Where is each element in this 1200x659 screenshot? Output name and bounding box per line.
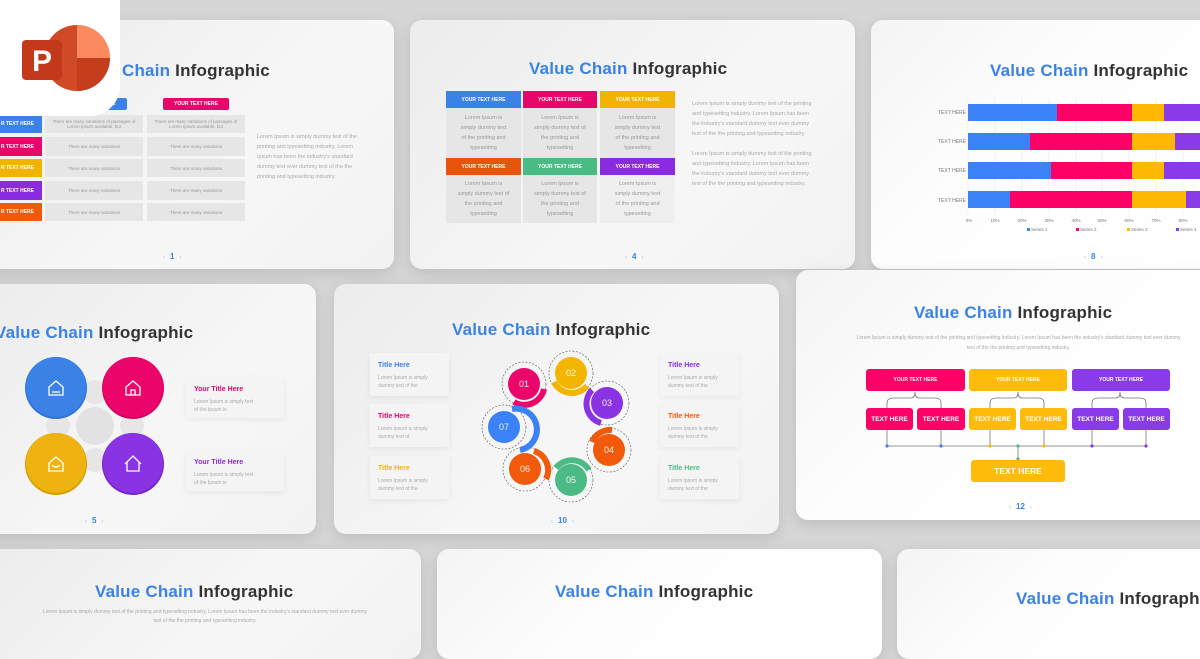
right cards <box>663 362 736 500</box>
grid slide 4: of the printing and <box>615 135 660 141</box>
grid slide 4: typesetting <box>547 145 573 151</box>
grid slide 4: YOUR TEXT HERE <box>616 164 659 170</box>
grid slide 4: Lorem Ipsum is <box>465 181 502 187</box>
left cards: dummy text of <box>378 434 409 440</box>
title slide 8: Value Chain Infographic <box>990 61 1188 80</box>
stacked bar chart: 0% <box>966 218 972 223</box>
hierarchy diagram: TEXT HERE <box>974 416 1011 422</box>
left cards: dummy text of the <box>378 486 418 492</box>
grid slide 4: typesetting <box>547 211 573 217</box>
page number 12: ‹ 12 › <box>1009 502 1032 511</box>
right cards: dummy text of the <box>668 486 708 492</box>
stacked bar chart <box>938 98 1200 232</box>
cycle diagram: 05 <box>566 475 576 485</box>
hierarchy diagram: TEXT HERE <box>871 416 908 422</box>
stacked bar chart: 40% <box>1071 218 1081 223</box>
right cards: Lorem Ipsum is simply <box>668 478 718 484</box>
left cards: Lorem Ipsum is simply <box>378 426 428 432</box>
grid slide 4: Lorem Ipsum is <box>619 115 656 121</box>
stacked bar chart: Series 3 <box>1131 227 1148 232</box>
title slide 5: Value Chain Infographic <box>0 323 193 342</box>
table slide 1: HERE <box>102 101 115 107</box>
hierarchy diagram: TEXT HERE <box>923 416 959 422</box>
left cards <box>373 362 446 500</box>
hierarchy diagram <box>866 369 1170 482</box>
page number 1: ‹ 1 › <box>163 252 181 261</box>
stacked bar chart: 20% <box>1017 218 1027 223</box>
table slide 1: There are many variations <box>170 166 222 170</box>
card: your title pink: of the Ipsum is <box>194 407 227 413</box>
grid slide 4: Lorem Ipsum is <box>541 181 579 187</box>
grid slide 4: typesetting <box>470 211 497 217</box>
cycle diagram: 03 <box>602 398 612 408</box>
table slide 1: There are many variations <box>68 144 120 149</box>
grid slide 4: YOUR TEXT HERE <box>462 96 505 102</box>
grid slide 4: YOUR TEXT HERE <box>616 96 659 102</box>
page number 5: ‹ 5 › <box>85 516 103 525</box>
slide 10: cycle <box>334 284 779 534</box>
grid slide 4: simply dummy text of <box>458 191 509 197</box>
cycle diagram: 07 <box>499 422 509 432</box>
slide 8: bar chart <box>871 20 1200 269</box>
card: your title purple: Lorem Ipsum is simply text <box>194 472 253 478</box>
slide 12: hierarchy <box>796 270 1200 520</box>
right cards: Title Here <box>668 465 700 472</box>
table slide 1: There are many variations <box>68 188 120 193</box>
slide 5: circles <box>0 284 316 534</box>
stacked bar chart: Series 4 <box>1180 227 1197 232</box>
grid slide 4: simply dummy text <box>615 191 660 197</box>
stacked bar chart: 30% <box>1044 218 1054 223</box>
table slide 1: There are many variations <box>68 166 120 170</box>
slide 1: table <box>0 20 394 269</box>
cycle diagram: 06 <box>520 464 530 474</box>
slide 4: grid <box>410 20 855 269</box>
paragraph slide 1: Lorem Ipsum is simply dummy text of the printing and typesetting industry. Lorem Ipsum has been the industry's standard dummy text ever dummy text of the the printing and typesetting industry. <box>257 134 357 180</box>
stacked bar chart: 50% <box>1097 218 1107 223</box>
grid slide 4: the printing and <box>465 201 502 207</box>
icon: powerpoint <box>22 25 110 91</box>
stacked bar chart: Series 1 <box>1031 227 1048 232</box>
table slide 1: There are many variations of passages of <box>53 119 135 124</box>
hierarchy diagram: TEXT HERE <box>1077 416 1114 422</box>
powerpoint logo panel <box>0 0 120 116</box>
grid slide 4: YOUR TEXT HERE <box>462 164 505 170</box>
grid slide 4: Lorem Ipsum is <box>541 115 579 121</box>
card: your title pink <box>186 377 284 418</box>
stacked bar chart: TEXT HERE <box>938 110 967 116</box>
title bottom middle: Value Chain Infographic <box>555 582 753 601</box>
stacked bar chart: TEXT HERE <box>938 139 967 145</box>
stacked bar chart: 70% <box>1151 218 1161 223</box>
paragraphs slide 4: Lorem Ipsum is simply dummy text of the printing and typesetting industry. Lorem Ipsum has been the industry's standard dummy text ever dummy text of the the printing and typesetting industry. <box>692 101 812 137</box>
hierarchy diagram: TEXT HERE <box>1025 416 1062 422</box>
left cards: Title Here <box>378 465 410 472</box>
grid slide 4 <box>446 91 675 223</box>
title slide 12: Value Chain Infographic <box>914 303 1112 322</box>
title bottom left: Value Chain Infographic <box>95 582 293 601</box>
table slide 1: R TEXT HERE <box>1 121 34 127</box>
card: your title pink: Lorem Ipsum is simply text <box>194 399 253 405</box>
grid slide 4: simply dummy text <box>615 125 660 131</box>
stacked bar chart: 10% <box>990 218 1000 223</box>
table slide 1: There are many variations <box>170 188 222 193</box>
grid slide 4: typesetting <box>470 145 497 151</box>
right cards: Title Here <box>668 413 700 420</box>
cycle diagram: 04 <box>604 445 614 455</box>
paragraph slide 12: Lorem Ipsum is simply dummy text of the printing and typesetting industry. Lorem Ipsum has been the industry's standard dummy text ever dummy text of the the printing and typesetting industry. <box>856 335 1181 351</box>
title slide 4: Value Chain Infographic <box>529 59 727 78</box>
table slide 1: There are many variations <box>68 210 120 214</box>
hierarchy diagram: YOUR TEXT HERE <box>894 377 937 383</box>
cycle diagram <box>482 350 632 502</box>
card: your title pink: Your Title Here <box>194 386 243 393</box>
cycle diagram: 02 <box>566 368 576 378</box>
table slide 1 <box>0 98 245 221</box>
left cards: Lorem Ipsum is simply <box>378 478 428 484</box>
slide bottom right <box>897 549 1200 659</box>
table slide 1: R TEXT HERE <box>1 165 34 171</box>
right cards: Title Here <box>668 362 700 369</box>
stacked bar chart: TEXT HERE <box>938 198 967 204</box>
title slide 1: Chain Infographic <box>122 61 270 80</box>
circles diagram <box>25 357 164 495</box>
page number 10: ‹ 10 › <box>551 516 574 525</box>
slide bottom middle <box>437 549 882 659</box>
card: your title purple <box>186 450 284 491</box>
card: your title purple: of the Ipsum is <box>194 480 227 486</box>
grid slide 4: typesetting <box>624 145 651 151</box>
grid slide 4: YOUR TEXT HERE <box>538 164 582 170</box>
hierarchy diagram: YOUR TEXT HERE <box>996 377 1040 383</box>
left cards: Title Here <box>378 362 410 369</box>
hierarchy diagram: TEXT HERE <box>994 466 1042 476</box>
grid slide 4: Lorem Ipsum is <box>465 115 502 121</box>
page number 8: ‹ 8 › <box>1084 252 1102 261</box>
grid slide 4: YOUR TEXT HERE <box>538 96 582 102</box>
grid slide 4: the printing and <box>541 201 579 207</box>
grid slide 4: simply dummy text of <box>534 191 586 197</box>
hierarchy diagram: YOUR TEXT HERE <box>1099 377 1143 383</box>
stacked bar chart: Series 2 <box>1080 227 1097 232</box>
stacked bar chart: TEXT HERE <box>938 168 967 174</box>
cycle diagram: 01 <box>519 379 529 389</box>
table slide 1: R TEXT HERE <box>1 144 34 150</box>
grid slide 4: of the printing and <box>615 201 660 207</box>
page number 4: ‹ 4 › <box>625 252 643 261</box>
table slide 1: There are many variations <box>170 210 222 214</box>
right cards: dummy text of the <box>668 383 708 389</box>
card: your title purple: Your Title Here <box>194 459 243 466</box>
grid slide 4: Lorem Ipsum is <box>619 181 656 187</box>
stacked bar chart: 80% <box>1178 218 1188 223</box>
left cards: dummy text of the <box>378 383 418 389</box>
grid slide 4: typesetting <box>624 211 651 217</box>
slide bottom left <box>0 549 421 659</box>
icon: powerpoint: P <box>32 45 52 78</box>
stacked bar chart: 60% <box>1124 218 1134 223</box>
table slide 1: There are many variations <box>170 144 222 149</box>
grid slide 4: simply dummy text of <box>534 125 586 131</box>
table slide 1: YOUR TEXT HERE <box>174 101 218 107</box>
hierarchy diagram: TEXT HERE <box>1128 416 1165 422</box>
table slide 1: R TEXT HERE <box>1 209 34 215</box>
title slide 10: Value Chain Infographic <box>452 320 650 339</box>
table slide 1: There are many variations of passages of <box>155 119 237 124</box>
left cards: Title Here <box>378 413 410 420</box>
table slide 1: Lorem Ipsum available, but <box>169 124 223 129</box>
left cards: Lorem Ipsum is simply <box>378 375 428 381</box>
right cards: Lorem Ipsum is simply <box>668 375 718 381</box>
grid slide 4: the printing and <box>541 135 579 141</box>
table slide 1: R TEXT HERE <box>1 188 34 194</box>
paragraphs slide 4 <box>692 101 812 187</box>
paragraphs slide 4: Lorem Ipsum is simply dummy text of the printing and typesetting industry. Lorem Ipsum has been the industry's standard dummy text ever dummy text of the the printing and typesetting industry. <box>692 151 812 187</box>
right cards: Lorem Ipsum is simply <box>668 426 718 432</box>
grid slide 4: simply dummy text <box>461 125 506 131</box>
table slide 1: Lorem Ipsum available, but <box>67 124 121 129</box>
grid slide 4: of the printing and <box>461 135 506 141</box>
right cards: dummy text of the <box>668 434 708 440</box>
paragraph bottom left: Lorem Ipsum is simply dummy text of the printing and typesetting industry. Lorem Ipsum has been the industry's standard dummy text ever dummy text of the the printing and typesetting industry. <box>43 609 367 624</box>
